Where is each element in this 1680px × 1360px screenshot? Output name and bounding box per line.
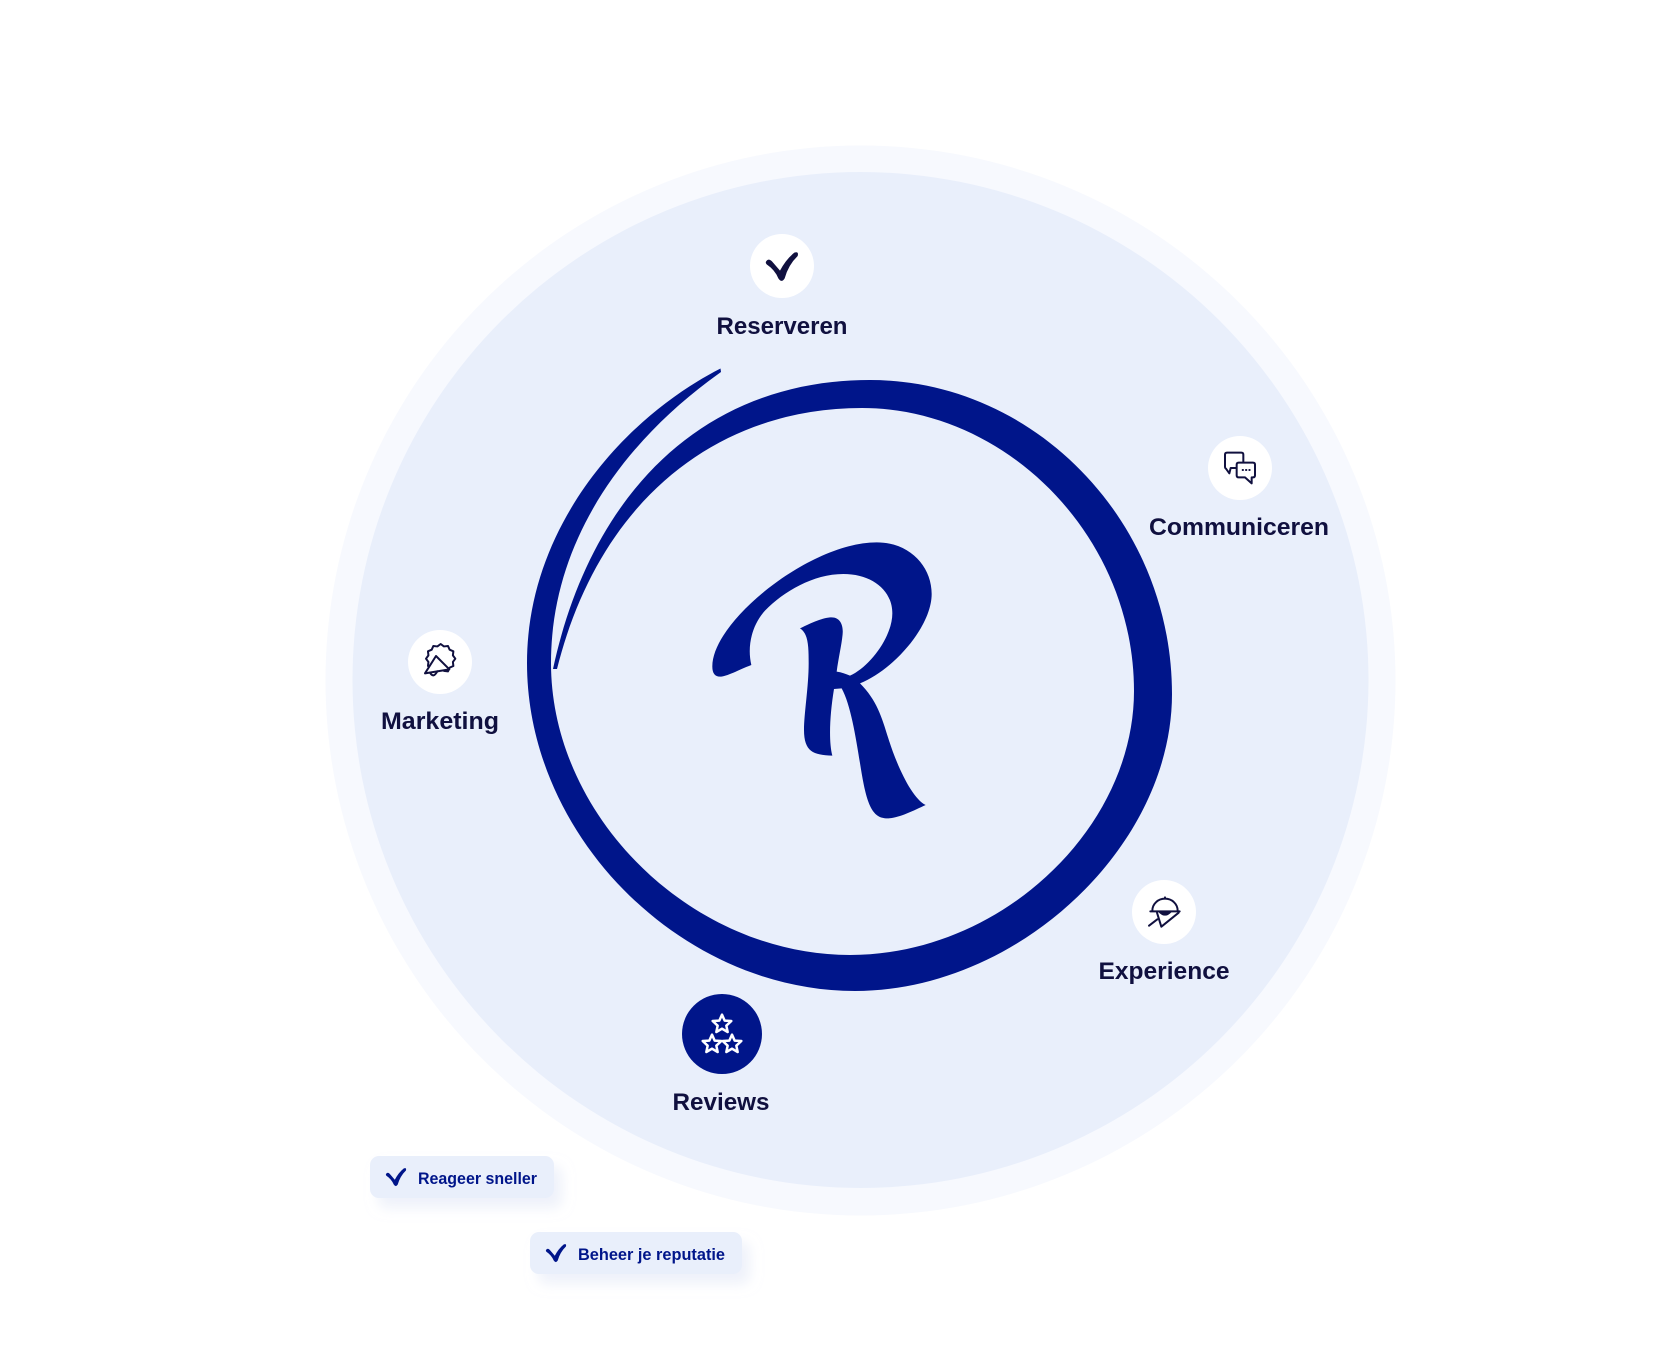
icon: chat bubbles in white circle <box>1208 436 1272 500</box>
item: Communiceren <box>1149 436 1329 541</box>
item: Experience <box>1098 880 1230 985</box>
label: Communiceren: Communiceren <box>1149 514 1329 541</box>
logo: letter R <box>712 542 932 818</box>
item: Reviews <box>672 994 770 1116</box>
panel: outer pale circle <box>326 146 1396 1216</box>
logo: spiral ring <box>527 368 1172 991</box>
panel: inner light blue circle <box>352 172 1368 1188</box>
icon: check in white circle <box>750 234 814 298</box>
icon: check <box>546 1244 566 1262</box>
item: Marketing <box>381 630 499 735</box>
label: Beheer je reputatie: Beheer je reputatie <box>578 1245 725 1264</box>
callout: Reageer sneller <box>370 1156 554 1198</box>
label: Experience: Experience <box>1098 958 1230 985</box>
label: Marketing: Marketing <box>381 708 499 735</box>
item: Reserveren <box>716 234 848 340</box>
label: Reviews: Reviews <box>672 1089 770 1116</box>
icon: check <box>386 1168 406 1186</box>
label: Reserveren: Reserveren <box>716 313 848 340</box>
callout: Beheer je reputatie <box>530 1232 742 1274</box>
icon: three stars in blue circle <box>682 994 762 1074</box>
icon: megaphone badge in white circle <box>408 630 472 694</box>
label: Reageer sneller: Reageer sneller <box>418 1169 537 1188</box>
icon: serving cloche in white circle <box>1132 880 1196 944</box>
